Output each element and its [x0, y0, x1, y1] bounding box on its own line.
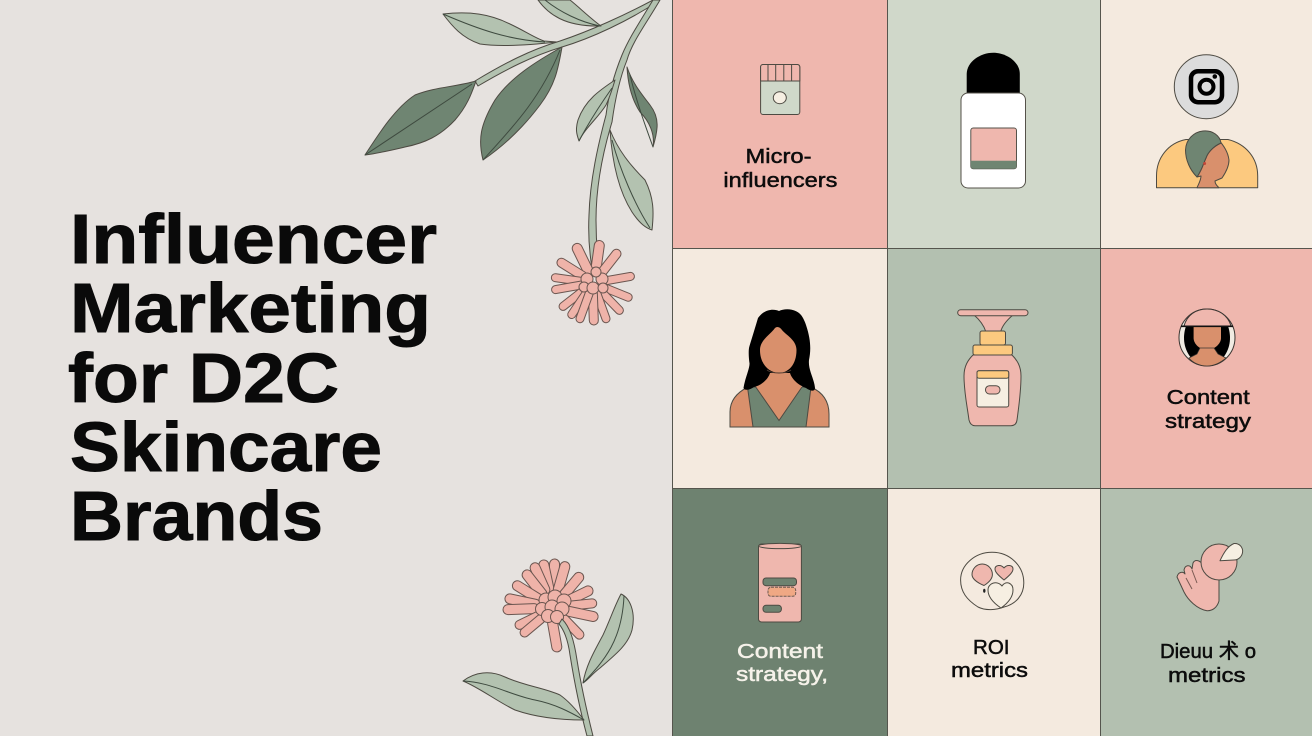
- label: content strategy: [1165, 386, 1252, 433]
- panel: pump bottle: [888, 248, 1100, 488]
- title: Skincare: [70, 408, 382, 486]
- icon: person profile: [1156, 131, 1258, 188]
- panel: content strategy pink: [1100, 248, 1312, 488]
- title: Influencer: [70, 200, 437, 278]
- icon: woman in circle: [1179, 309, 1235, 366]
- label: content strategy,: [736, 640, 828, 686]
- panel: ROI metrics: [888, 488, 1100, 736]
- label: content strategy: strategy: [1165, 410, 1252, 433]
- label: content strategy: Content: [1167, 386, 1250, 409]
- label: ROI metrics: metrics: [951, 659, 1028, 682]
- title: for D2C: [68, 339, 339, 417]
- label: micro-influencers: [723, 145, 837, 192]
- leaf: small left light: [576, 80, 615, 141]
- title: Brands: [70, 477, 323, 555]
- icon: hand with applicator: [1177, 543, 1243, 611]
- panel: micro-influencers: [672, 0, 888, 248]
- label: micro-influencers: Micro-: [746, 145, 812, 168]
- bottom flower: [503, 559, 599, 653]
- panel: bottle: [888, 0, 1100, 248]
- label: Dieuu metrics: metrics: [1168, 664, 1246, 687]
- panel: woman portrait: [672, 248, 888, 488]
- leaf: small right dark: [627, 67, 657, 147]
- icon: hearts in circle: [961, 552, 1024, 610]
- leaf: upper light: [443, 13, 557, 45]
- icon: woman with dark hair: [730, 309, 829, 427]
- title: Marketing: [70, 269, 431, 347]
- label: Dieuu metrics: [1160, 640, 1256, 687]
- icon: instagram badge: [1174, 55, 1238, 119]
- panel: metrics sage: [1100, 488, 1312, 736]
- top botanical branch: [365, 0, 660, 268]
- bottom stem and leaves: [463, 594, 633, 736]
- leaf: left: [463, 673, 584, 720]
- top flower: [551, 240, 635, 325]
- icon: jar: [758, 543, 801, 622]
- icon: roll-on bottle: [961, 53, 1026, 188]
- panel: instagram: [1100, 0, 1312, 248]
- icon: product tile: [761, 64, 800, 114]
- leaf: upper left dark: [365, 81, 476, 155]
- label: content strategy,: Content: [737, 640, 823, 663]
- icon: pump bottle: [958, 310, 1028, 426]
- leaf: right: [583, 594, 633, 683]
- panel: content strategy green: [672, 488, 888, 736]
- leaf: top light: [538, 0, 601, 26]
- leaf: long right light: [610, 130, 653, 230]
- label: content strategy,: strategy,: [736, 663, 828, 686]
- leaf: middle dark: [481, 47, 562, 160]
- label: Dieuu metrics: Dieuu 术 o: [1160, 640, 1256, 663]
- title: [68, 200, 437, 555]
- label: ROI metrics: ROI: [973, 636, 1010, 659]
- label: micro-influencers: influencers: [723, 169, 837, 192]
- label: ROI metrics: [951, 636, 1028, 682]
